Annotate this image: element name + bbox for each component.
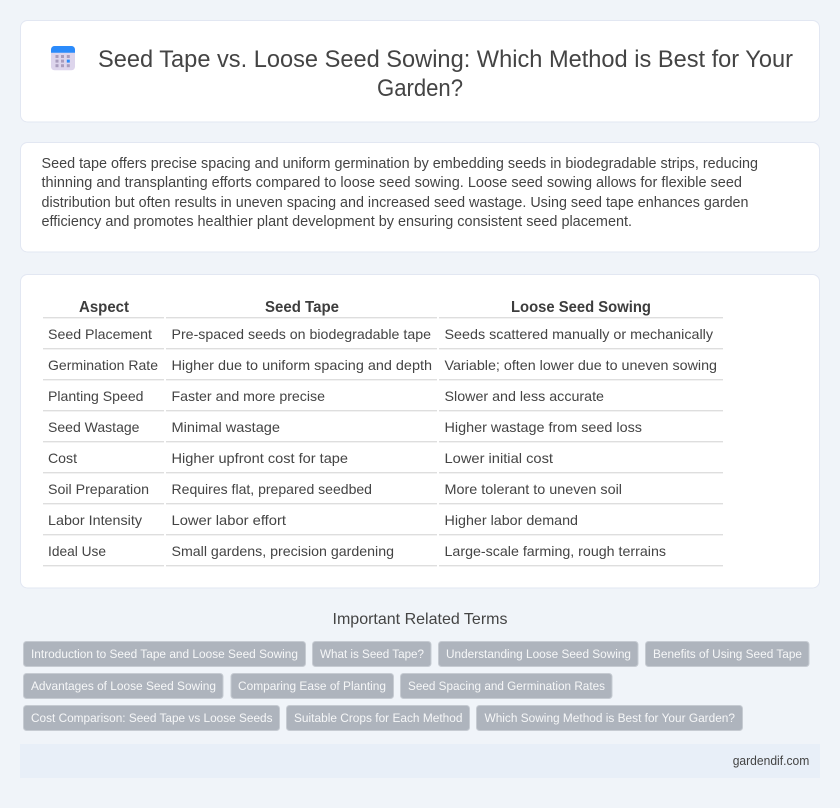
text block: introduction paragraph: efficiency and promotes healthier plant development by ensuring consistent seed placement. bbox=[42, 214, 632, 230]
table row: ideal use: Small gardens, precision gardening bbox=[172, 543, 394, 559]
table header row: Seed Tape bbox=[265, 299, 339, 316]
table row: germination rate: Variable; often lower due to uneven sowing bbox=[444, 357, 717, 373]
table row: soil preparation: More tolerant to uneven soil bbox=[444, 481, 622, 497]
tag bbox=[24, 674, 223, 698]
table row: soil preparation: Requires flat, prepared seedbed bbox=[172, 481, 372, 497]
panel: comparison table bbox=[20, 274, 820, 588]
title: Seed Tape vs. Loose Seed Sowing: Which Method is Best for Your bbox=[98, 46, 793, 73]
table row: germination rate bbox=[43, 357, 723, 380]
tag bbox=[24, 706, 280, 730]
tag bbox=[231, 674, 394, 698]
icon: calendar bbox=[51, 46, 75, 70]
table row: cost: Lower initial cost bbox=[444, 450, 553, 466]
footer text: site name: gardendif.com bbox=[733, 754, 809, 768]
tag bbox=[24, 642, 306, 666]
text block: introduction paragraph: Seed tape offers precise spacing and uniform germination by embedding seeds in biodegradable strips, reducing bbox=[42, 156, 758, 172]
table row: seed wastage: Higher wastage from seed loss bbox=[444, 419, 642, 435]
tag bbox=[312, 642, 431, 666]
table row: planting speed: Slower and less accurate bbox=[444, 388, 604, 404]
table row: seed wastage bbox=[43, 419, 723, 442]
text block: introduction paragraph bbox=[42, 156, 758, 230]
tag: Which Sowing Method is Best for Your Garden? bbox=[484, 711, 735, 725]
table row: seed placement: Pre-spaced seeds on biodegradable tape bbox=[172, 326, 431, 342]
tag: Seed Spacing and Germination Rates bbox=[408, 679, 605, 693]
table row: labor intensity: Higher labor demand bbox=[444, 512, 578, 528]
tag: Advantages of Loose Seed Sowing bbox=[31, 679, 216, 693]
tag bbox=[438, 642, 638, 666]
text block: introduction paragraph: distribution but often results in uneven spacing and increased seed wastage. Using seed tape enhances garden bbox=[42, 195, 749, 211]
table row: ideal use: Ideal Use bbox=[48, 543, 106, 559]
table row: labor intensity: Labor Intensity bbox=[48, 512, 142, 528]
table row: germination rate: Germination Rate bbox=[48, 357, 158, 373]
table row: seed placement: Seeds scattered manually or mechanically bbox=[444, 326, 713, 342]
table row: seed placement: Seed Placement bbox=[48, 326, 152, 342]
tag: Benefits of Using Seed Tape bbox=[653, 647, 802, 661]
panel: introduction bbox=[20, 142, 820, 252]
title: Garden? bbox=[377, 75, 463, 102]
heading: important related terms: Important Related Terms bbox=[332, 611, 508, 628]
table row: labor intensity bbox=[43, 512, 723, 535]
tag: Comparing Ease of Planting bbox=[238, 679, 386, 693]
tag bbox=[476, 706, 742, 730]
tag: What is Seed Tape? bbox=[320, 647, 424, 661]
table row: planting speed: Faster and more precise bbox=[172, 388, 325, 404]
tag bbox=[400, 674, 612, 698]
tag bbox=[646, 642, 809, 666]
table row: ideal use bbox=[43, 543, 723, 566]
table row: seed placement bbox=[43, 326, 723, 349]
table header row bbox=[43, 299, 723, 318]
table row: cost: Cost bbox=[48, 450, 77, 466]
footer bar bbox=[20, 744, 820, 778]
tag group: related terms bbox=[24, 642, 809, 730]
tag: Cost Comparison: Seed Tape vs Loose Seeds bbox=[31, 711, 272, 725]
table row: planting speed bbox=[43, 388, 723, 411]
table row: seed wastage: Minimal wastage bbox=[172, 419, 280, 435]
title bbox=[98, 46, 793, 102]
table row: cost bbox=[43, 450, 723, 473]
tag bbox=[286, 706, 470, 730]
table header row: Aspect bbox=[79, 299, 129, 316]
table header row: Loose Seed Sowing bbox=[511, 299, 651, 316]
tag: Suitable Crops for Each Method bbox=[294, 711, 463, 725]
tag: Understanding Loose Seed Sowing bbox=[446, 647, 631, 661]
table row: soil preparation bbox=[43, 481, 723, 504]
table row: soil preparation: Soil Preparation bbox=[48, 481, 149, 497]
tag: Introduction to Seed Tape and Loose Seed Sowing bbox=[31, 647, 298, 661]
table row: cost: Higher upfront cost for tape bbox=[172, 450, 348, 466]
table row: labor intensity: Lower labor effort bbox=[172, 512, 286, 528]
table row: planting speed: Planting Speed bbox=[48, 388, 144, 404]
table row: germination rate: Higher due to uniform spacing and depth bbox=[172, 357, 432, 373]
table row: seed wastage: Seed Wastage bbox=[48, 419, 140, 435]
panel: header bbox=[20, 20, 820, 122]
text block: introduction paragraph: thinning and transplanting efforts compared to loose seed sowing. Loose seed sowing allows for flexible seed bbox=[42, 175, 742, 191]
table row: ideal use: Large-scale farming, rough terrains bbox=[444, 543, 666, 559]
